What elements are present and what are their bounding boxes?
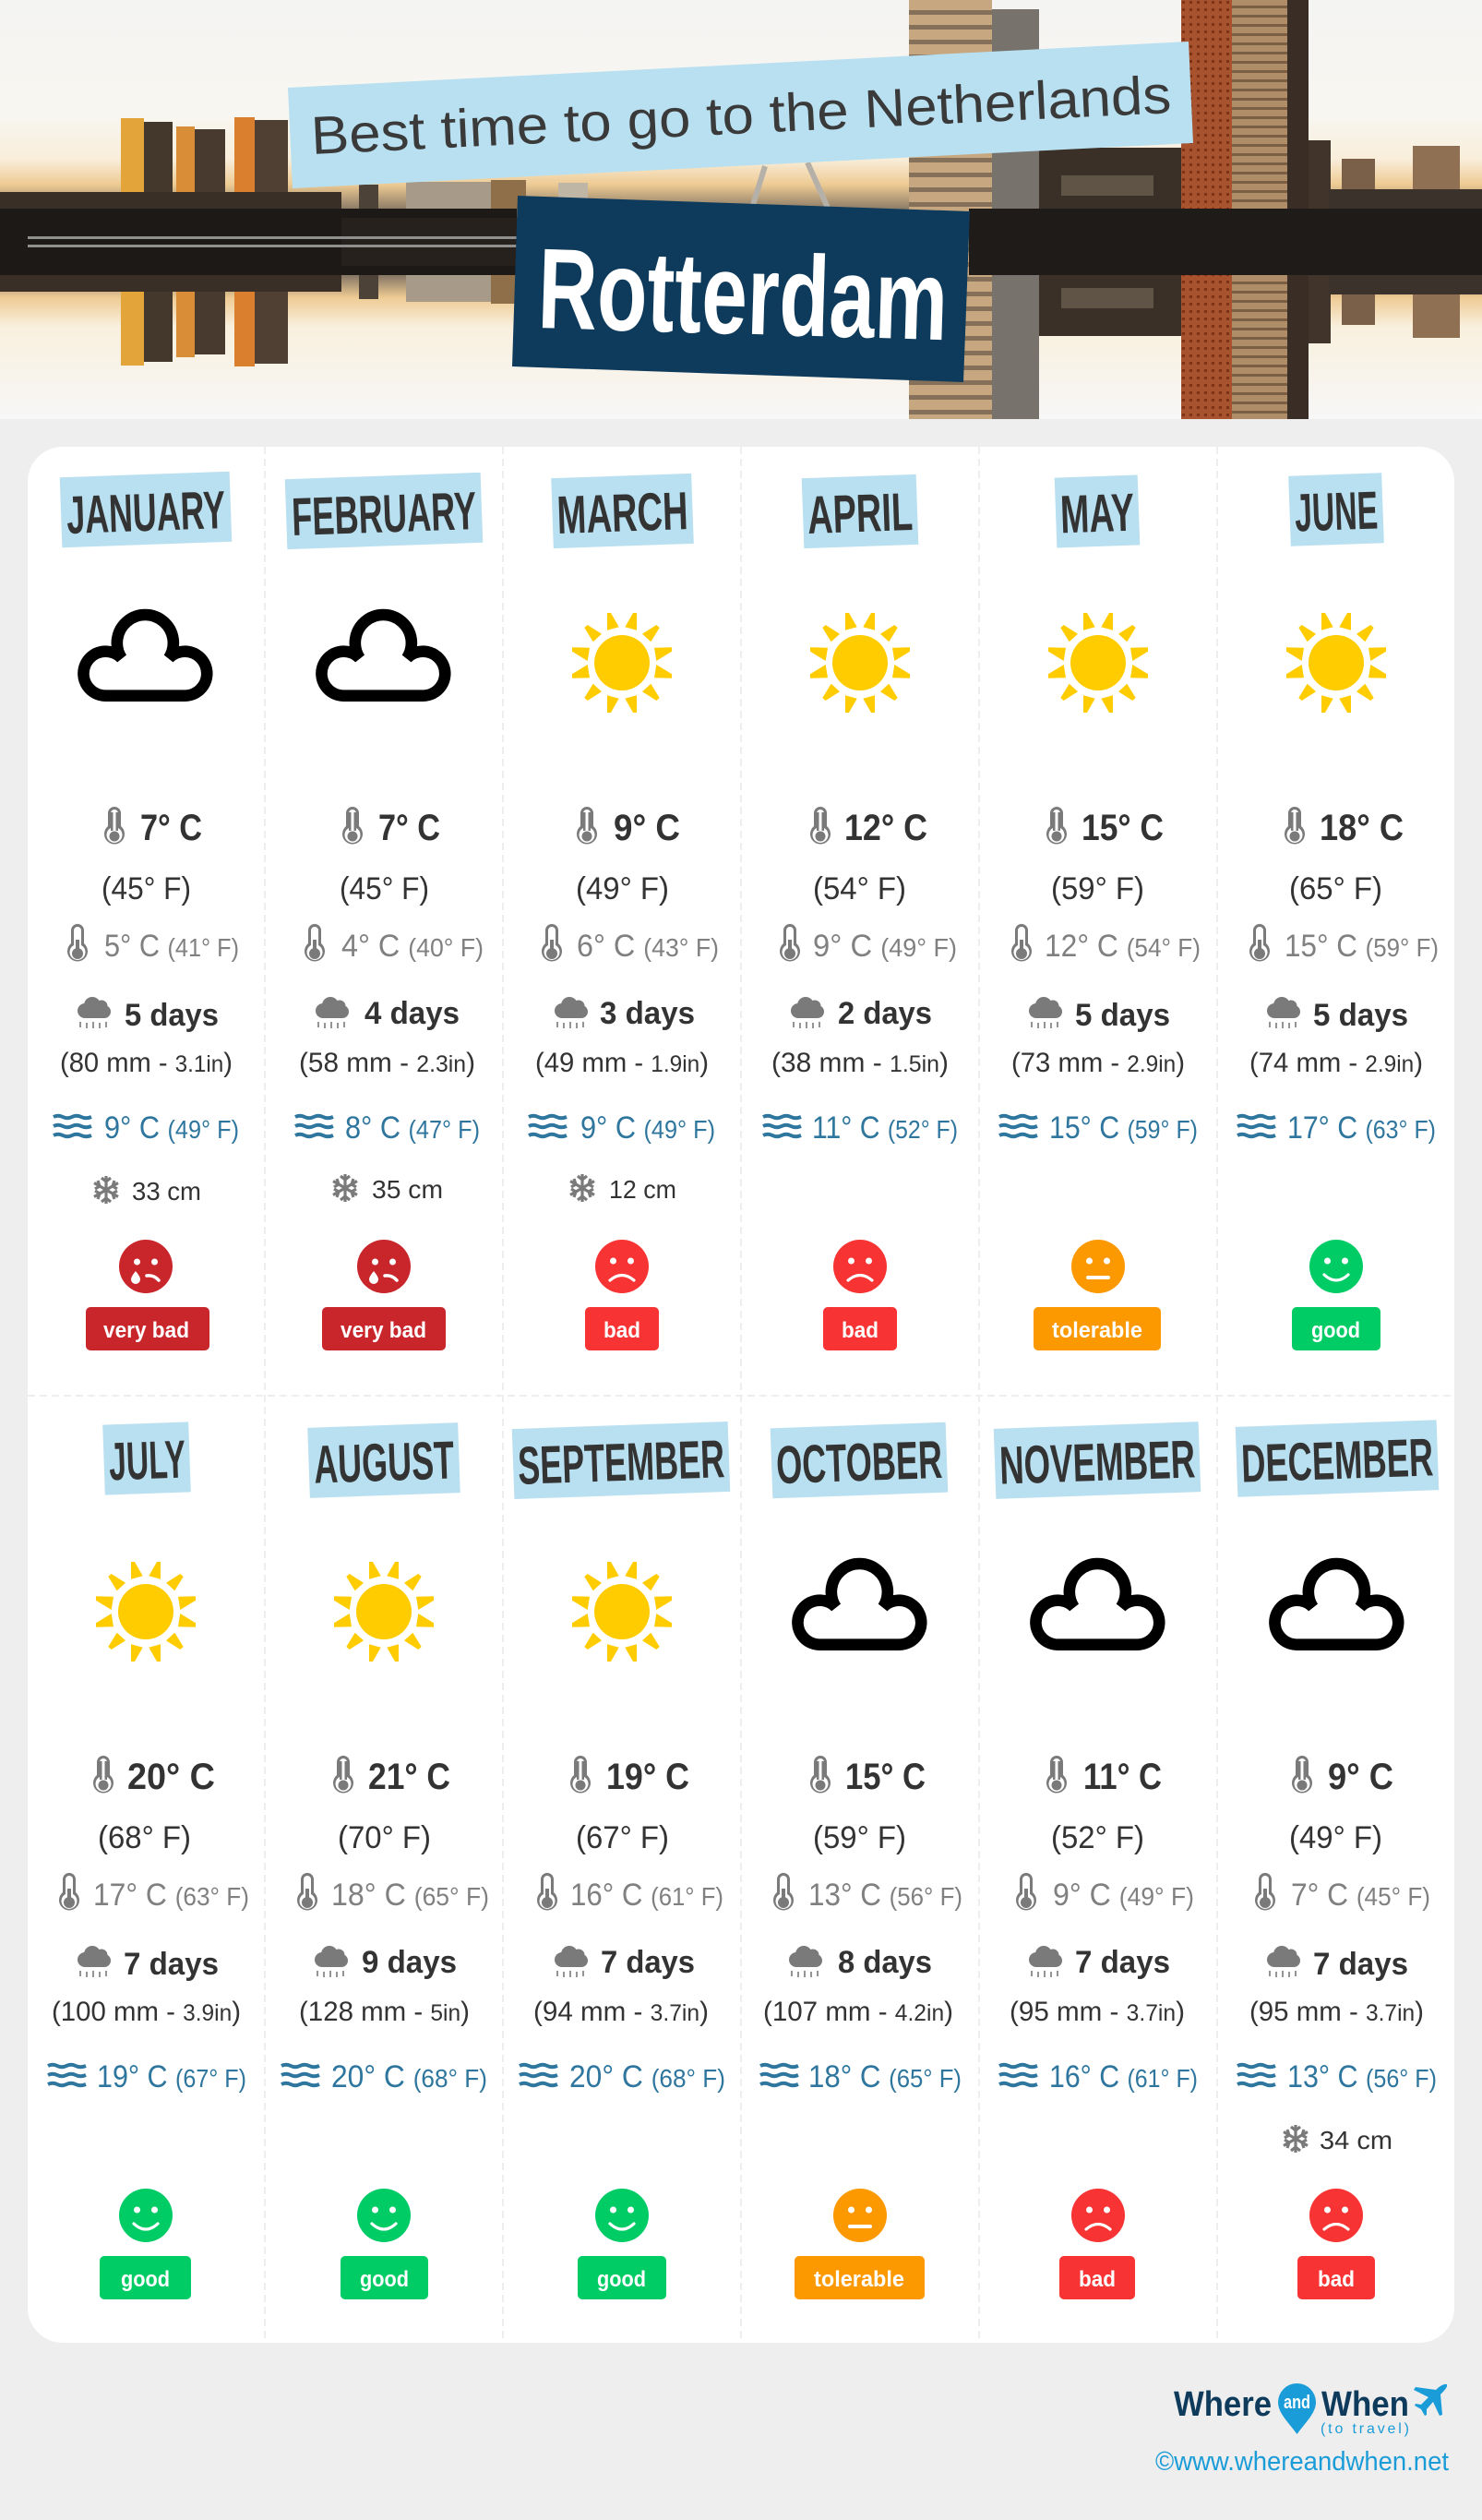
heading: FEBRUARY — [291, 481, 477, 547]
rain days — [555, 1945, 695, 1980]
month: April — [763, 474, 958, 1350]
average temperature: 12° C — [844, 808, 927, 848]
rating face — [1071, 1240, 1125, 1293]
average temperature — [93, 1756, 215, 1797]
rain days: 3 days — [600, 996, 695, 1031]
heading — [285, 473, 483, 549]
sea temperature: 16° C (61° F) — [1049, 2059, 1198, 2094]
rainfall: (100 mm - 3.9in) — [52, 1997, 241, 2027]
temperature in fahrenheit: (45° F) — [102, 871, 191, 906]
month: March — [529, 474, 719, 1350]
icon: airplane — [1414, 2384, 1447, 2416]
temperature in fahrenheit: (52° F) — [1051, 1820, 1144, 1855]
average temperature — [1285, 807, 1404, 848]
average temperature — [333, 1756, 450, 1797]
sea temperature: 9° C (49° F) — [580, 1110, 715, 1146]
title ribbon: Best time to go to the Netherlands — [288, 42, 1193, 188]
sea temperature: 19° C (67° F) — [97, 2059, 246, 2094]
average temperature — [577, 807, 680, 848]
heading — [102, 1422, 191, 1495]
heading — [771, 1422, 948, 1498]
average temperature — [810, 807, 927, 848]
snow depth: 35 cm — [372, 1175, 443, 1204]
low temperature: 6° C (43° F) — [577, 929, 719, 964]
heading: NOVEMBER — [998, 1429, 1196, 1496]
heading: AUGUST — [313, 1430, 455, 1495]
rain days: 8 days — [838, 1945, 932, 1980]
month: May — [999, 474, 1201, 1350]
low temperature — [67, 924, 239, 964]
heading — [802, 474, 918, 548]
sea temperature: 11° C (52° F) — [812, 1110, 958, 1146]
rating badge — [322, 1307, 446, 1350]
sea temperature: 18° C (65° F) — [808, 2059, 962, 2094]
low temperature: 9° C (49° F) — [813, 929, 957, 964]
sea temperature: 13° C (56° F) — [1287, 2059, 1437, 2094]
rain days — [1029, 1945, 1170, 1980]
month: February — [285, 473, 484, 1350]
heading — [60, 472, 232, 547]
rating badge — [1292, 1307, 1380, 1350]
heading — [994, 1422, 1201, 1499]
average temperature: 7° C — [140, 808, 202, 848]
snow depth: 12 cm — [609, 1175, 676, 1204]
rating badge — [578, 2256, 666, 2299]
rating badge: tolerable — [1052, 1318, 1142, 1343]
temperature in fahrenheit: (45° F) — [340, 871, 429, 906]
rating badge: bad — [1079, 2267, 1116, 2292]
sea temperature: 20° C (68° F) — [569, 2059, 725, 2094]
month: October — [760, 1422, 962, 2299]
icon: cloud — [83, 615, 207, 696]
low temperature — [1016, 1873, 1194, 1913]
rating face — [1309, 2189, 1363, 2242]
snow depth — [94, 1176, 201, 1206]
temperature in fahrenheit: (70° F) — [338, 1820, 431, 1855]
temperature in fahrenheit: (65° F) — [1289, 871, 1382, 906]
icon: sun — [96, 1562, 196, 1662]
rainfall: (58 mm - 2.3in) — [299, 1048, 475, 1078]
icon: sun — [1048, 613, 1148, 713]
month: September — [512, 1422, 730, 2299]
icon: sun — [572, 1562, 672, 1662]
rain days — [78, 997, 219, 1033]
average temperature: 18° C — [1320, 808, 1404, 848]
rain days — [789, 1945, 932, 1980]
rain days: 5 days — [1075, 998, 1170, 1033]
rating face — [833, 2189, 887, 2242]
rating badge: bad — [604, 1318, 640, 1343]
average temperature — [342, 807, 440, 848]
average temperature: 9° C — [614, 808, 680, 848]
low temperature — [305, 924, 484, 964]
month: November — [994, 1422, 1201, 2299]
rating badge — [100, 2256, 191, 2299]
rain days — [791, 996, 932, 1031]
rating face — [833, 1240, 887, 1293]
rating face — [357, 2189, 411, 2242]
rainfall: (74 mm - 2.9in) — [1249, 1048, 1423, 1078]
rating badge — [341, 2256, 428, 2299]
rating badge: very bad — [103, 1318, 189, 1343]
logo: Where and When (to travel) — [1174, 2383, 1447, 2437]
heading — [1288, 473, 1384, 546]
icon: sun — [810, 613, 910, 713]
rain days: 5 days — [1313, 998, 1408, 1033]
logo: Where and When (to travel): and — [1284, 2393, 1310, 2413]
rainfall: (95 mm - 3.7in) — [1010, 1997, 1185, 2027]
icon: cloud — [1035, 1564, 1159, 1645]
rain days — [555, 996, 695, 1031]
snow depth — [570, 1174, 676, 1204]
rating badge: good — [597, 2267, 646, 2292]
rating badge — [823, 1307, 897, 1350]
low temperature: 18° C (65° F) — [331, 1878, 489, 1913]
month: December — [1236, 1420, 1439, 2299]
rating face — [1309, 1240, 1363, 1293]
rainfall: (49 mm - 1.9in) — [535, 1048, 709, 1078]
heading: MARCH — [556, 481, 689, 546]
rain days: 7 days — [601, 1945, 695, 1980]
rain days — [1267, 997, 1408, 1033]
rain days — [1029, 997, 1170, 1033]
heading — [512, 1422, 730, 1499]
rating badge — [795, 2256, 925, 2299]
average temperature: 15° C — [1082, 808, 1164, 848]
heading: OCTOBER — [775, 1430, 943, 1495]
rain days — [78, 1946, 219, 1982]
average temperature: 20° C — [127, 1757, 215, 1797]
website credit: ©www.whereandwhen.net — [1155, 2447, 1449, 2477]
snow depth: 33 cm — [132, 1177, 201, 1206]
sea temperature — [529, 1110, 715, 1146]
sea temperature: 15° C (59° F) — [1049, 1110, 1198, 1146]
rating badge: good — [360, 2267, 409, 2292]
sea temperature: 9° C (49° F) — [104, 1110, 239, 1146]
icon: sun — [1286, 613, 1386, 713]
temperature in fahrenheit: (68° F) — [98, 1820, 191, 1855]
heading — [1055, 474, 1140, 548]
low temperature: 13° C (56° F) — [808, 1878, 962, 1913]
icon: sun — [334, 1562, 434, 1662]
rain days: 5 days — [125, 998, 219, 1033]
temperature in fahrenheit: (67° F) — [576, 1820, 669, 1855]
rainfall: (73 mm - 2.9in) — [1011, 1048, 1185, 1078]
rating badge — [1297, 2256, 1375, 2299]
rain days — [315, 1945, 457, 1980]
rating badge — [585, 1307, 659, 1350]
temperature in fahrenheit: (49° F) — [1289, 1820, 1382, 1855]
rain days: 4 days — [365, 996, 460, 1031]
title box: Rotterdam — [512, 196, 970, 382]
rating face — [595, 1240, 649, 1293]
heading: SEPTEMBER — [517, 1429, 725, 1496]
logo: Where and When (to travel): (to travel) — [1321, 2421, 1409, 2437]
icon: map pin — [1278, 2383, 1316, 2434]
low temperature: 15° C (59° F) — [1285, 929, 1439, 964]
snow depth — [1284, 2125, 1392, 2154]
average temperature — [1046, 807, 1164, 848]
rating badge: good — [1311, 1318, 1360, 1343]
icon: cloud — [797, 1564, 921, 1645]
low temperature: 7° C (45° F) — [1291, 1878, 1430, 1913]
rating badge: bad — [842, 1318, 878, 1343]
rain days: 7 days — [124, 1947, 219, 1982]
icon: cloud — [321, 615, 445, 696]
average temperature: 11° C — [1083, 1757, 1162, 1797]
rating face — [119, 2189, 173, 2242]
logo: Where and When (to travel): Where — [1174, 2385, 1272, 2424]
temperature in fahrenheit: (49° F) — [576, 871, 669, 906]
rainfall: (38 mm - 1.5in) — [771, 1048, 949, 1078]
title box: Rotterdam: Rotterdam — [536, 225, 950, 365]
average temperature: 9° C — [1328, 1757, 1393, 1797]
rating face — [595, 2189, 649, 2242]
heading — [307, 1422, 460, 1498]
low temperature — [542, 924, 719, 964]
month: January — [54, 472, 239, 1350]
month: June — [1237, 473, 1439, 1350]
rating face — [119, 1240, 173, 1293]
heading: JULY — [108, 1430, 186, 1492]
average temperature — [570, 1756, 689, 1797]
temperature in fahrenheit: (59° F) — [1051, 871, 1144, 906]
rating badge — [86, 1307, 209, 1350]
rating badge — [1059, 2256, 1135, 2299]
icon: sun — [572, 613, 672, 713]
rain days: 9 days — [362, 1945, 457, 1980]
rating face — [357, 1240, 411, 1293]
temperature in fahrenheit: (54° F) — [813, 871, 906, 906]
rating badge: good — [121, 2267, 170, 2292]
heading: JANUARY — [66, 480, 226, 546]
rain days — [1267, 1946, 1408, 1982]
heading — [551, 474, 694, 548]
rating badge — [1034, 1307, 1161, 1350]
rainfall: (95 mm - 3.7in) — [1249, 1997, 1424, 2027]
heading: APRIL — [807, 482, 914, 546]
month: August — [281, 1422, 489, 2299]
rain days: 7 days — [1075, 1945, 1170, 1980]
rain days: 2 days — [838, 996, 932, 1031]
average temperature: 15° C — [845, 1757, 926, 1797]
snow depth: 34 cm — [1320, 2126, 1392, 2154]
low temperature: 5° C (41° F) — [104, 929, 239, 964]
heading: JUNE — [1294, 480, 1379, 544]
title ribbon: Best time to go to the Netherlands: Best time to go to the Netherlands — [309, 65, 1173, 166]
average temperature — [104, 807, 202, 848]
rainfall: (128 mm - 5in) — [299, 1997, 470, 2027]
month: July — [48, 1422, 249, 2299]
sea temperature: 20° C (68° F) — [331, 2059, 487, 2094]
average temperature — [1046, 1756, 1162, 1797]
rating face — [1071, 2189, 1125, 2242]
rainfall: (107 mm - 4.2in) — [763, 1997, 953, 2027]
heading: MAY — [1059, 483, 1135, 545]
header: Rotterdam skyline photo — [0, 0, 1482, 419]
temperature in fahrenheit: (59° F) — [813, 1820, 906, 1855]
average temperature — [810, 1756, 926, 1797]
icon: cloud — [1274, 1564, 1398, 1645]
rain days: 7 days — [1313, 1947, 1408, 1982]
low temperature: 17° C (63° F) — [93, 1878, 249, 1913]
average temperature: 19° C — [606, 1757, 689, 1797]
rainfall: (80 mm - 3.1in) — [60, 1048, 233, 1078]
low temperature: 4° C (40° F) — [341, 929, 484, 964]
average temperature: 21° C — [368, 1757, 450, 1797]
sea temperature — [54, 1110, 239, 1146]
sea temperature: 8° C (47° F) — [345, 1110, 480, 1146]
rating badge: very bad — [341, 1318, 426, 1343]
rating badge: bad — [1318, 2267, 1355, 2292]
snow depth — [333, 1174, 443, 1204]
average temperature — [1292, 1756, 1393, 1797]
rain days — [316, 996, 460, 1031]
low temperature — [1255, 1873, 1430, 1913]
rainfall: (94 mm - 3.7in) — [533, 1997, 709, 2027]
low temperature: 16° C (61° F) — [570, 1878, 723, 1913]
low temperature: 9° C (49° F) — [1053, 1878, 1194, 1913]
rating badge: tolerable — [814, 2267, 904, 2292]
logo: Where and When (to travel): When — [1321, 2385, 1409, 2424]
average temperature: 7° C — [378, 808, 440, 848]
panel: monthly calendar — [28, 447, 1454, 2343]
low temperature: 12° C (54° F) — [1045, 929, 1201, 964]
sea temperature: 17° C (63° F) — [1287, 1110, 1436, 1146]
